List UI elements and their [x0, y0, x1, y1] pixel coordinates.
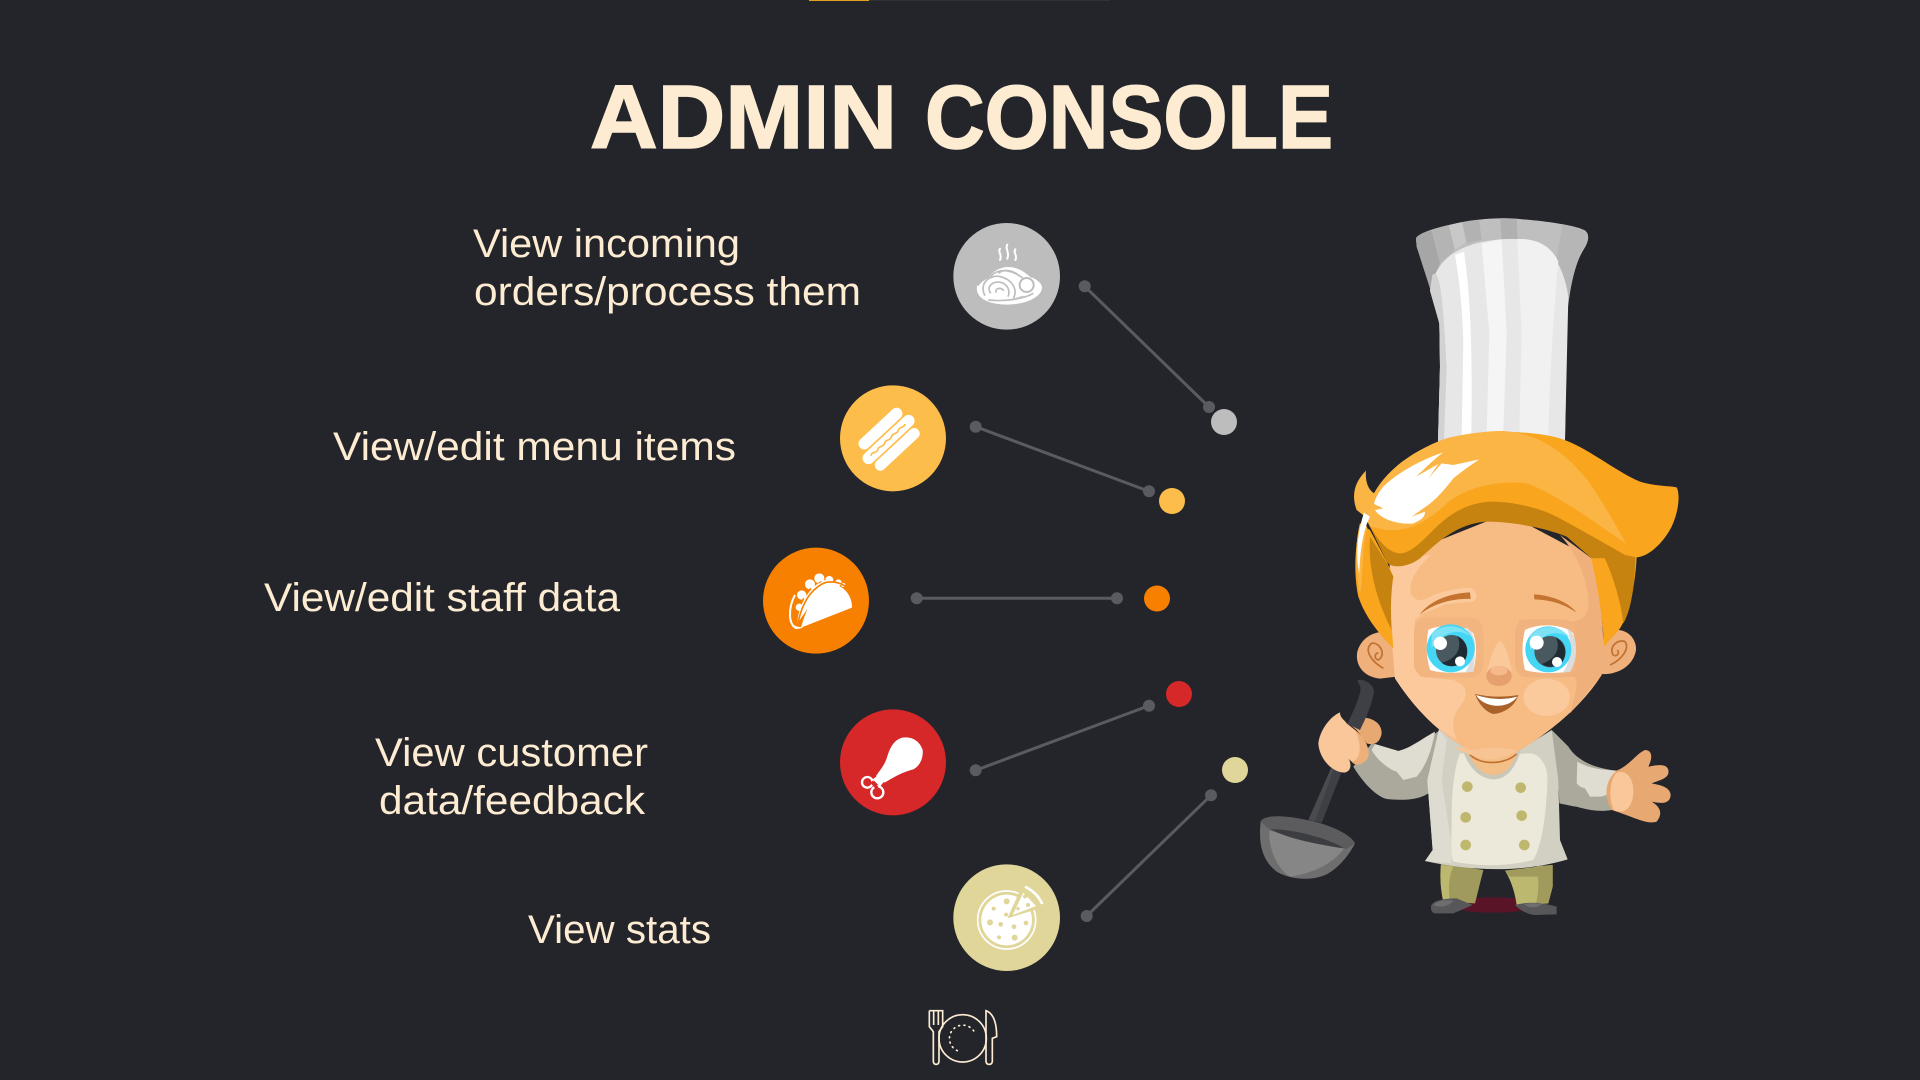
icon: chicken leg badge	[840, 709, 946, 815]
connector 2	[970, 421, 1155, 497]
connector 1	[1079, 280, 1215, 413]
left arm sleeve	[1353, 730, 1443, 800]
title: ADMIN	[590, 68, 897, 168]
icon: hot dog badge	[840, 385, 946, 491]
label: view customer data/feedback: data/feedback	[379, 779, 646, 823]
label: view incoming orders: orders/process them	[474, 270, 861, 314]
infographic canvas	[264, 0, 1679, 1066]
chef jacket	[1425, 729, 1577, 869]
chef character	[1260, 215, 1679, 915]
connector dot 2	[1159, 488, 1185, 514]
icon: noodles badge	[953, 223, 1060, 330]
right arm and hand	[1552, 730, 1671, 822]
connector dot 4	[1166, 681, 1192, 707]
label: view incoming orders	[473, 222, 861, 314]
chef hand holding ladle	[1318, 680, 1382, 773]
connector 4	[970, 700, 1155, 776]
connector dot 5	[1222, 757, 1248, 783]
chef hat	[1413, 215, 1590, 443]
chef ears	[1357, 630, 1636, 679]
label: view customer data/feedback: View customer	[375, 731, 648, 775]
lower body: shadow, legs, shoes	[1260, 729, 1671, 915]
title	[590, 68, 1333, 168]
connector dot 1	[1211, 409, 1237, 435]
connector 3	[911, 592, 1123, 604]
title: CONSOLE	[925, 68, 1333, 168]
icon: pizza badge	[953, 864, 1060, 971]
label: view/edit staff data: View/edit staff data	[264, 576, 621, 620]
chef hair	[1354, 431, 1679, 648]
chef head	[1390, 513, 1603, 759]
connector 5	[1081, 789, 1217, 922]
icon: taco badge	[763, 548, 869, 654]
label: view stats: View stats	[528, 908, 711, 952]
chef face	[1419, 592, 1577, 714]
ladle	[1260, 767, 1355, 879]
label: view incoming orders: View incoming	[473, 222, 740, 266]
label: view/edit menu items: View/edit menu items	[333, 425, 736, 469]
icon: plate with fork and knife	[929, 1011, 997, 1064]
connector dot 3	[1144, 586, 1170, 612]
label: view customer data/feedback	[375, 731, 648, 823]
